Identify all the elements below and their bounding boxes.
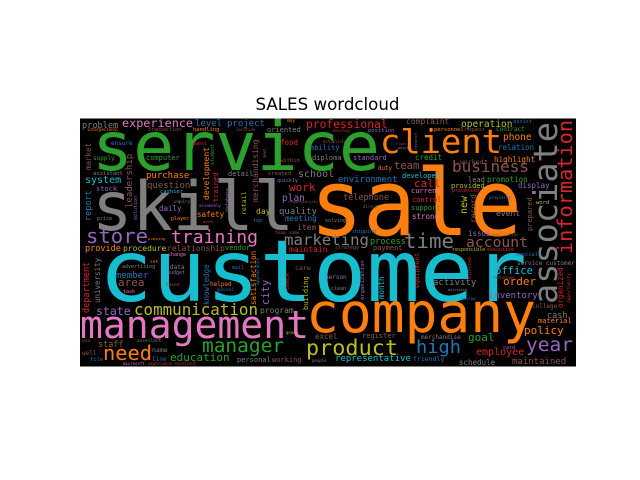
medium and small words, upper left: leadership xyxy=(125,154,135,208)
medium and small words, lower left xyxy=(82,244,328,366)
word: high: high xyxy=(416,337,461,358)
medium and small words, lower right: office xyxy=(495,265,533,277)
medium and small words, lower right: schedule xyxy=(459,358,496,367)
medium and small words, upper left: inquiry xyxy=(173,199,190,204)
medium and small words, upper right: operation xyxy=(461,119,512,130)
medium and small words, lower right: merchandise xyxy=(421,334,461,341)
medium and small words, upper right: providing xyxy=(489,195,511,200)
medium and small words, upper left: supply xyxy=(93,155,115,162)
medium and small words, lower left: mail xyxy=(232,265,244,271)
medium and small words, upper right: lead xyxy=(468,176,485,184)
medium and small words, upper left: professional xyxy=(306,118,388,131)
medium and small words, upper left: responsibility xyxy=(288,200,318,204)
medium and small words, lower left: people xyxy=(312,358,327,363)
medium and small words, lower right: inventory xyxy=(489,291,538,301)
medium and small words, upper right: current xyxy=(411,187,441,195)
medium and small words, lower left: staff xyxy=(98,340,124,350)
medium and small words, lower right: organized xyxy=(556,267,565,308)
medium and small words, lower right: responsible xyxy=(452,247,485,253)
medium and small words, lower right: strategy xyxy=(335,245,359,251)
medium and small words, upper left: ability xyxy=(310,144,340,152)
medium and small words, upper left: created xyxy=(268,171,291,177)
medium and small words, upper right: duty xyxy=(378,166,392,172)
word: year: year xyxy=(526,334,573,356)
medium and small words, upper right: application xyxy=(492,232,519,237)
medium and small words, upper right: support xyxy=(411,204,441,212)
medium and small words, upper left: question xyxy=(147,181,190,191)
medium and small words, upper right: issue xyxy=(468,229,491,238)
medium and small words, upper right: control xyxy=(412,196,442,204)
medium and small words, upper right: strong xyxy=(412,212,439,221)
medium and small words, lower left: university xyxy=(93,257,102,303)
word: manager: manager xyxy=(202,335,284,357)
medium and small words, upper left: development xyxy=(202,147,211,200)
medium and small words, lower left: set xyxy=(150,259,158,265)
medium and small words, upper left: project xyxy=(227,119,265,129)
medium and small words, lower right: person xyxy=(325,274,347,281)
medium and small words, upper left: assistant xyxy=(93,171,123,177)
medium and small words, upper left: price xyxy=(97,216,112,222)
word: client: client xyxy=(380,122,502,161)
medium and small words, upper right: shipping xyxy=(352,229,376,235)
medium and small words, lower left: procedure xyxy=(123,244,167,253)
medium and small words, upper left: player xyxy=(171,216,189,222)
medium and small words, upper left: team name xyxy=(275,230,300,236)
medium and small words, upper left: cashier xyxy=(160,189,184,195)
word: skill: skill xyxy=(92,168,294,247)
word: customer: customer xyxy=(99,222,527,322)
medium and small words, upper right: position xyxy=(368,128,394,134)
medium and small words, lower right: special xyxy=(515,252,538,258)
medium and small words, lower left: care xyxy=(295,264,311,272)
medium and small words, upper right: record xyxy=(469,194,478,223)
medium and small words, lower left: advertising xyxy=(122,264,155,270)
word: marketing: marketing xyxy=(284,231,369,249)
medium and small words, lower left: task xyxy=(123,289,135,295)
medium and small words, upper right: developed xyxy=(402,172,440,180)
medium and small words, upper right: highlight xyxy=(494,155,535,164)
word: account: account xyxy=(466,235,528,251)
medium and small words, upper left: quickly xyxy=(277,178,298,184)
medium and small words, lower left: vendor xyxy=(225,244,250,252)
medium and small words, upper right: word xyxy=(536,200,549,206)
medium and small words, lower right: directed xyxy=(467,257,473,279)
medium and small words, lower right: technique xyxy=(493,275,515,280)
medium and small words, lower left: based xyxy=(166,282,180,288)
word: information: information xyxy=(553,120,577,254)
medium and small words, lower right: card xyxy=(503,345,515,351)
medium and small words, lower right: service customer xyxy=(517,260,575,267)
medium and small words, upper left: item xyxy=(297,223,316,232)
medium and small words, upper left: day xyxy=(256,207,271,216)
medium and small words, lower right: opportunity xyxy=(566,273,572,303)
medium and small words, lower left: file xyxy=(90,357,103,363)
medium and small words, upper left: work xyxy=(289,181,316,194)
word: business: business xyxy=(452,158,529,176)
medium and small words, lower left: check xyxy=(285,273,291,290)
medium and small words, lower right: representative xyxy=(335,354,411,364)
medium and small words, upper left: location xyxy=(236,127,256,132)
medium and small words, upper right: request xyxy=(464,127,485,133)
medium and small words, upper left: guest xyxy=(192,141,207,147)
medium and small words, lower left: change xyxy=(168,252,186,258)
medium and small words, lower right: month xyxy=(377,276,386,299)
medium and small words, upper left: daily xyxy=(159,204,182,213)
word: management: management xyxy=(80,303,309,347)
medium and small words, lower left: program xyxy=(260,306,294,315)
medium and small words, upper left: purchase xyxy=(146,171,189,181)
word: time: time xyxy=(404,229,454,253)
medium and small words, upper right: point xyxy=(398,146,409,150)
medium and small words, upper right xyxy=(325,117,550,247)
medium and small words, upper right: new xyxy=(459,195,470,214)
medium and small words, upper left: detail xyxy=(228,170,253,178)
medium and small words, lower left: name xyxy=(152,346,168,354)
medium and small words, lower left: working xyxy=(272,356,302,364)
medium and small words, lower left: personal xyxy=(237,356,271,364)
medium and small words, lower left: microsoft xyxy=(123,361,145,366)
medium and small words, lower left: city xyxy=(260,280,272,305)
medium and small words, upper left: oriented xyxy=(267,126,301,134)
medium and small words, lower left: knowledge xyxy=(202,264,211,305)
medium and small words, upper right: prepared xyxy=(526,197,534,231)
medium and small words, lower left: state xyxy=(96,304,131,318)
medium and small words, upper right: display xyxy=(518,181,550,190)
word: sale: sale xyxy=(310,150,522,257)
word: company: company xyxy=(306,281,536,345)
medium and small words, lower right: clean xyxy=(331,286,346,292)
medium and small words, upper right: direct xyxy=(363,204,378,209)
medium and small words, lower left: good xyxy=(286,330,296,335)
medium and small words, lower right: employee xyxy=(476,347,524,358)
medium and small words, upper left: solution xyxy=(133,196,139,220)
medium and small words, upper left: top xyxy=(253,218,262,224)
medium and small words, upper left: plan xyxy=(282,193,305,204)
medium and small words, upper right: personnel xyxy=(434,127,464,133)
word: training: training xyxy=(171,227,258,248)
medium and small words, lower left: use xyxy=(82,339,90,344)
medium and small words, upper left: may xyxy=(287,119,295,124)
medium and small words, lower left: line xyxy=(152,356,167,363)
medium and small words, upper right: assist xyxy=(513,119,532,125)
medium and small words, upper right: environment xyxy=(338,175,398,185)
medium and small words, upper right: worked. xyxy=(460,158,487,166)
medium and small words, upper left: school xyxy=(298,169,334,180)
medium and small words, upper right: process xyxy=(370,237,406,247)
medium and small words, upper left: meet xyxy=(262,148,267,158)
medium and small words, lower right: policy xyxy=(524,324,564,337)
medium and small words, lower left: data xyxy=(170,264,185,271)
medium and small words, upper left: market xyxy=(84,143,93,170)
medium and small words, upper left: retail xyxy=(240,191,248,215)
medium and small words, upper right: contract xyxy=(496,126,525,133)
medium and small words, lower right: excel xyxy=(315,332,338,341)
medium and small words, lower left: appearance xyxy=(256,258,261,285)
medium and small words, lower right: order xyxy=(503,275,536,288)
medium and small words, lower left: provide xyxy=(85,244,121,254)
medium and small words, lower right: goal xyxy=(468,331,494,344)
medium and small words, upper left: within xyxy=(280,158,300,164)
medium and small words, upper left: award xyxy=(203,220,214,224)
medium and small words, upper left: meeting xyxy=(285,214,317,223)
medium and small words, upper left: assemebly xyxy=(199,203,221,208)
medium and small words, lower right: material xyxy=(538,317,572,325)
medium and small words, upper left: planning xyxy=(148,237,165,241)
medium and small words, upper left: experience xyxy=(122,116,193,130)
medium and small words, lower left: member xyxy=(116,271,149,281)
medium and small words, upper right: complaint xyxy=(406,117,450,126)
medium and small words, upper left: handling xyxy=(193,127,220,133)
medium and small words, upper right: floor xyxy=(396,142,407,146)
medium and small words, upper left: system xyxy=(85,175,121,186)
medium and small words, lower right: maintained xyxy=(512,357,566,367)
medium and small words, upper right: event xyxy=(496,209,520,218)
panel: wordcloud background xyxy=(80,118,576,366)
medium and small words, lower right: equipment xyxy=(413,253,421,288)
medium and small words, upper left: stock xyxy=(96,185,118,193)
medium and small words, upper right: research xyxy=(414,133,418,150)
medium and small words, upper right: credit xyxy=(415,153,442,162)
word: communication: communication xyxy=(134,300,258,319)
medium and small words, upper left: food xyxy=(280,138,298,147)
medium and small words, lower right: college xyxy=(532,303,558,310)
medium and small words, upper left: ensure xyxy=(111,140,133,147)
word: store: store xyxy=(86,224,148,248)
medium and small words, upper right: provided xyxy=(451,182,485,190)
medium and small words, lower left: building xyxy=(302,276,310,310)
title: SALES wordcloud xyxy=(256,95,400,114)
medium and small words, upper left: diploma xyxy=(312,154,342,162)
medium and small words, lower left: department xyxy=(82,262,92,313)
medium and small words, lower left: education xyxy=(170,351,230,364)
medium and small words, upper right: phone xyxy=(503,132,532,143)
medium and small words, lower right: friendly xyxy=(413,355,444,363)
medium and small words, upper left: computer xyxy=(146,154,180,162)
medium and small words, upper left: database xyxy=(225,188,231,212)
medium and small words, upper right: solving xyxy=(325,218,346,224)
medium and small words, lower right: register xyxy=(362,332,396,340)
word: product: product xyxy=(306,336,398,360)
medium and small words, upper right: telephone xyxy=(343,193,389,203)
medium and small words, upper right: team xyxy=(394,160,419,172)
medium and small words, lower left: experience excellent xyxy=(148,361,197,366)
medium and small words, lower right xyxy=(315,244,575,367)
medium and small words, lower left: satisfaction xyxy=(249,251,258,305)
medium and small words, lower right: review xyxy=(461,296,476,301)
medium and small words, lower right: payment xyxy=(373,244,403,252)
medium and small words, lower right: motivated xyxy=(448,288,467,292)
medium and small words, upper left: problem xyxy=(82,121,118,131)
medium and small words, lower right: activity xyxy=(433,278,477,288)
medium and small words, lower left: excellent xyxy=(137,338,162,344)
medium and small words, upper right: develop xyxy=(333,128,350,133)
word: service: service xyxy=(92,108,380,187)
medium and small words, lower left: helped xyxy=(210,281,232,288)
medium and small words, upper right: relation xyxy=(498,143,534,152)
medium and small words, upper right: processed xyxy=(452,188,479,194)
medium and small words, lower left: area xyxy=(118,276,144,289)
medium and small words, lower right: cash xyxy=(547,311,567,321)
medium and small words, upper left: student xyxy=(210,144,216,165)
medium and small words, lower left: budget xyxy=(167,270,185,276)
word: need: need xyxy=(103,341,152,365)
medium and small words, upper left: trained xyxy=(212,172,220,202)
medium and small words, upper right: call xyxy=(414,177,440,190)
medium and small words, lower right: executive xyxy=(487,247,514,253)
medium and small words, lower left: well xyxy=(82,350,97,357)
medium and small words, lower right: organization xyxy=(360,260,366,300)
medium and small words, upper left: merchandising xyxy=(251,139,260,202)
medium and small words, upper left: quality xyxy=(279,207,318,217)
medium and small words, lower left: relationship xyxy=(167,244,225,253)
medium and small words, upper left: interpersonal xyxy=(87,127,119,132)
medium and small words, upper left xyxy=(82,116,388,241)
medium and small words, upper left: transaction xyxy=(148,127,181,133)
medium and small words, upper left: level xyxy=(195,119,222,129)
medium and small words, lower left: general xyxy=(217,287,234,292)
medium and small words, lower left: maintain xyxy=(289,245,328,254)
medium and small words, upper right: promotion xyxy=(487,175,528,184)
medium and small words, upper left: safety xyxy=(197,210,225,219)
medium and small words, upper left: establish xyxy=(323,139,345,144)
panel: wordcloud words xyxy=(80,108,577,367)
medium and small words, upper left: report xyxy=(84,190,94,221)
word: associate: associate xyxy=(526,122,565,304)
medium and small words, upper right: standard xyxy=(353,154,387,162)
